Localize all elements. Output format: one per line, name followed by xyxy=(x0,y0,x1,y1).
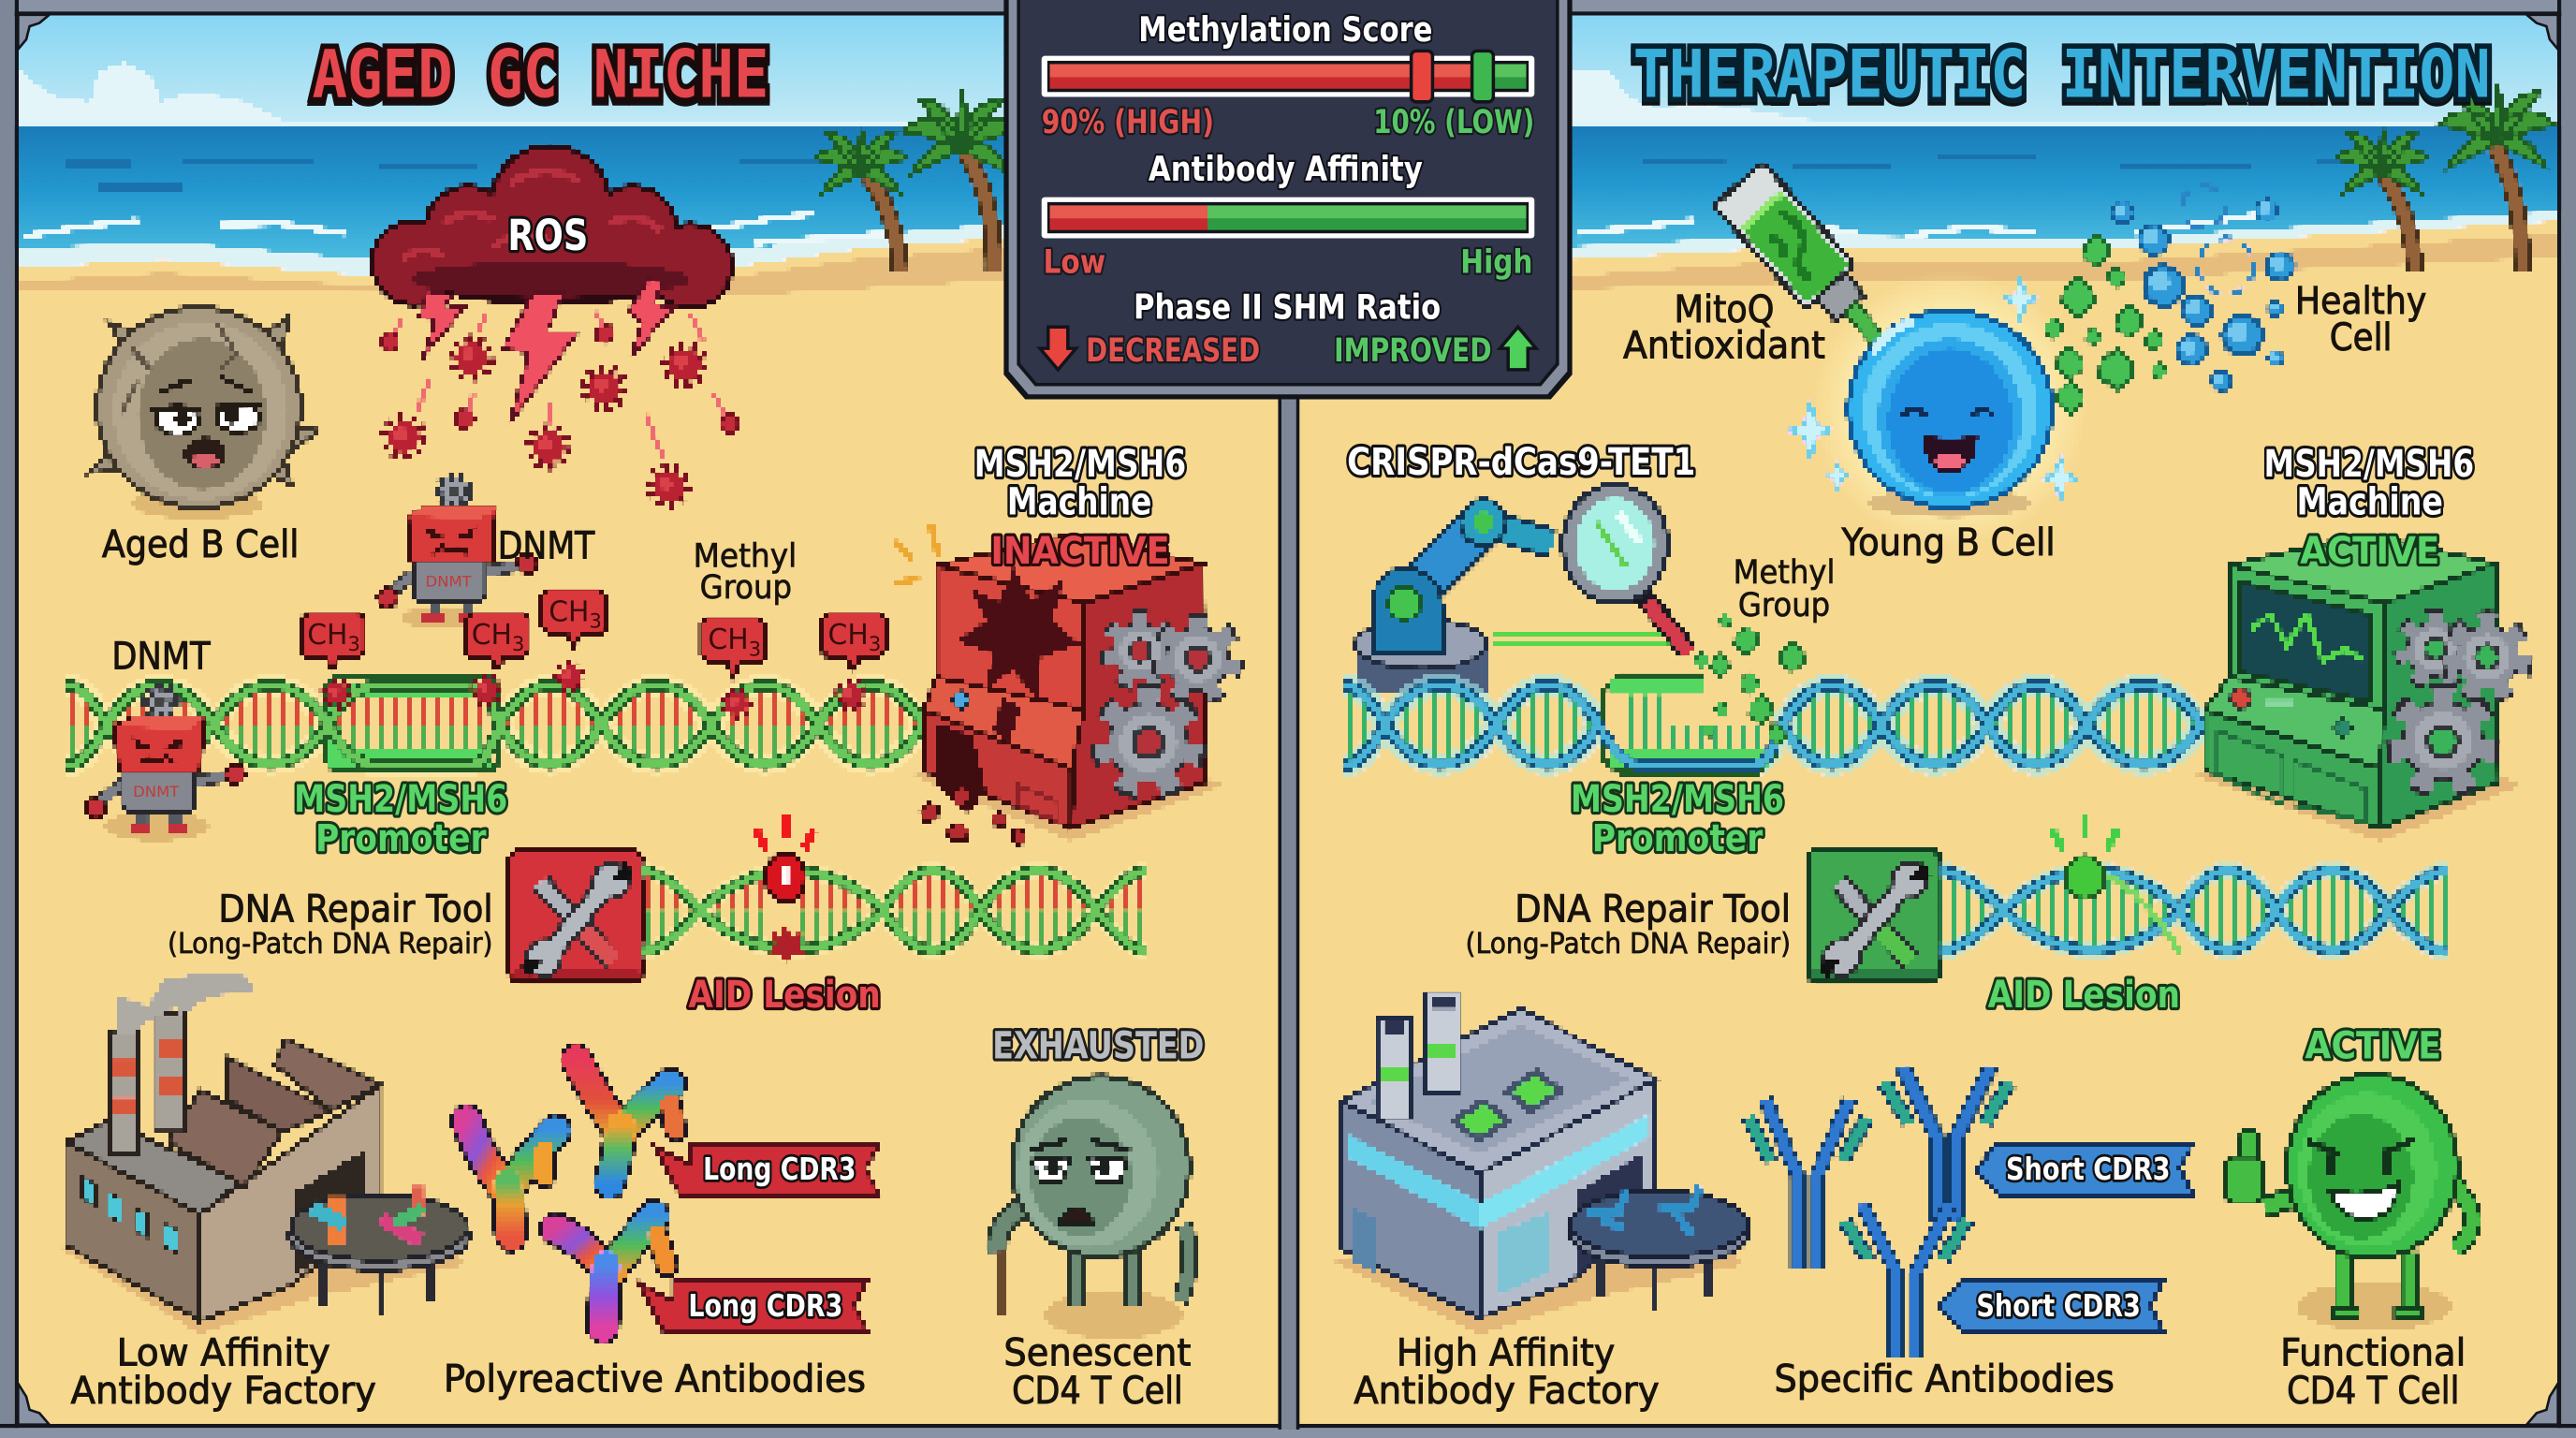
sea xyxy=(0,128,1292,259)
promoter box xyxy=(327,677,498,770)
ROS: ROS xyxy=(507,211,588,260)
promoter label: Promoter xyxy=(315,816,487,860)
specific label: Specific Antibodies xyxy=(1775,1357,2115,1401)
functional T cell xyxy=(2224,1075,2472,1331)
healthy cell label: Healthy xyxy=(2295,279,2426,323)
sparkles xyxy=(1788,276,2078,501)
promoter label right xyxy=(1571,777,1784,860)
methyl group right: Group xyxy=(1738,586,1830,624)
Young B Cell: Young B Cell xyxy=(1841,521,2056,565)
repaired pin xyxy=(2052,815,2117,899)
methyl group right xyxy=(1734,553,1835,624)
CH3 labels: 3 xyxy=(589,609,602,632)
polyreactive antibodies xyxy=(466,1060,675,1328)
Long CDR3 ribbons xyxy=(637,1144,879,1331)
repair tool icon xyxy=(509,849,642,983)
young B cell glow xyxy=(1812,271,2088,547)
lesion pin xyxy=(755,815,815,964)
decreased label: DECREASED xyxy=(1086,331,1260,370)
CH3 labels: CH xyxy=(307,619,347,652)
factory label right: Antibody Factory xyxy=(1354,1369,1660,1413)
CRISPR robot arm xyxy=(1355,485,1689,694)
long CDR3 xyxy=(688,1151,856,1324)
MitoQ label xyxy=(1623,287,1825,368)
affinity bar xyxy=(1042,198,1534,238)
10 percent label: 10% (LOW) xyxy=(1373,103,1534,141)
active T cell tag: ACTIVE xyxy=(2305,1023,2441,1067)
conveyor table xyxy=(289,1186,470,1314)
DNA strand right xyxy=(1344,614,2202,772)
machine label: Machine xyxy=(1007,479,1151,523)
machine label: MSH2/MSH6 xyxy=(974,442,1186,486)
DNA repair tool right xyxy=(1466,888,1791,961)
sky cloud xyxy=(20,63,292,125)
low affinity factory xyxy=(59,973,470,1334)
MitoQ bottle xyxy=(1714,162,1912,372)
inactive label: INACTIVE xyxy=(990,529,1170,573)
polyreactive label: Polyreactive Antibodies xyxy=(444,1357,866,1401)
functional label: Functional xyxy=(2280,1330,2466,1374)
labels: right panel xyxy=(1347,279,2474,1413)
machine inactive xyxy=(894,522,1236,846)
machine label right: MSH2/MSH6 xyxy=(2264,442,2474,486)
functional label xyxy=(2280,1330,2466,1413)
title: Therapeutic Intervention: THERAPEUTIC INTERVENTION xyxy=(1633,37,2491,113)
low label: Low xyxy=(1043,242,1105,281)
blue healthy particles xyxy=(2112,185,2294,391)
Methyl Group: Group xyxy=(700,568,792,607)
ROS particles xyxy=(379,312,740,506)
DNA strand main xyxy=(67,664,923,770)
healthy cell label xyxy=(2295,279,2426,360)
90 percent label: 90% (HIGH) xyxy=(1042,103,1214,141)
promoter label right: Promoter xyxy=(1592,816,1763,860)
promoter label: MSH2/MSH6 xyxy=(294,777,507,821)
specific antibodies xyxy=(1748,1066,2009,1356)
senescent T cell xyxy=(997,1077,1190,1339)
repair DNA right xyxy=(1940,815,2446,953)
foam band xyxy=(0,213,1018,276)
MitoQ label: Antioxidant xyxy=(1623,324,1825,368)
CRISPR label: CRISPR-dCas9-TET1 xyxy=(1347,440,1695,484)
palm trees right xyxy=(2334,82,2556,271)
active machine label: ACTIVE xyxy=(2300,529,2439,573)
icon: DNMT robot left xyxy=(85,687,245,835)
wet sand band xyxy=(0,246,1018,296)
methyl group right: Methyl xyxy=(1734,553,1835,592)
methylation bar xyxy=(1042,51,1534,102)
CH3 labels: CH xyxy=(472,619,512,652)
machine label right xyxy=(2264,442,2474,523)
titles xyxy=(312,37,2491,113)
promoter box right xyxy=(1603,675,1775,772)
released methyl particles xyxy=(1695,614,1804,744)
robot body text: DNMT xyxy=(426,573,472,591)
methylation heading: Methylation Score xyxy=(1138,9,1432,50)
healthy cell label: Cell xyxy=(2330,315,2392,360)
senescent label xyxy=(1003,1330,1191,1413)
CH3 tags xyxy=(300,590,886,677)
factory label xyxy=(70,1330,376,1413)
Methyl Group: Methyl xyxy=(694,537,797,576)
DNA repair tool label xyxy=(168,888,493,961)
promoter label right: MSH2/MSH6 xyxy=(1571,777,1784,821)
factory label right: High Affinity xyxy=(1397,1330,1615,1374)
sea right xyxy=(1292,128,2576,246)
improved label: IMPROVED xyxy=(1334,331,1492,370)
arrow down xyxy=(1040,327,1076,370)
machine label right: Machine xyxy=(2297,479,2443,523)
DNA repair tool label: DNA Repair Tool xyxy=(218,888,493,932)
green healing particles xyxy=(2045,235,2166,414)
foam right xyxy=(1292,198,2576,263)
arrow up xyxy=(1500,327,1536,370)
conveyor table right xyxy=(1569,1186,1749,1310)
factory label: Antibody Factory xyxy=(70,1369,376,1413)
factory label right xyxy=(1354,1330,1660,1413)
repair tool icon right xyxy=(1808,849,1940,983)
MitoQ label: MitoQ xyxy=(1674,287,1775,331)
long CDR3: Long CDR3 xyxy=(688,1287,842,1324)
exhausted label: EXHAUSTED xyxy=(992,1023,1204,1067)
dashboard panel xyxy=(1003,0,1573,399)
CH3 labels: 3 xyxy=(749,637,761,660)
palm trees xyxy=(813,89,1020,271)
CH3 labels: CH xyxy=(549,595,589,628)
panel art: therapeutic intervention xyxy=(1292,0,2576,1438)
factory label: Low Affinity xyxy=(117,1330,330,1374)
SHM heading: Phase II SHM Ratio xyxy=(1134,286,1441,327)
robot body text left: DNMT xyxy=(133,783,180,800)
long CDR3: Long CDR3 xyxy=(703,1151,856,1187)
icon: aged B cell xyxy=(89,307,318,520)
wet sand right xyxy=(1292,233,2576,292)
machine label xyxy=(974,442,1186,523)
CH3 labels: 3 xyxy=(347,632,360,655)
labels: left panel xyxy=(70,211,1204,1413)
senescent label: Senescent xyxy=(1003,1330,1191,1374)
high label: High xyxy=(1460,242,1533,281)
panel art: aged GC niche xyxy=(0,0,1292,1438)
high affinity factory xyxy=(1334,992,1749,1334)
young B cell xyxy=(1848,311,2052,518)
CH3 labels: CH xyxy=(828,619,869,652)
ROS storm cloud xyxy=(370,143,735,311)
DNA repair tool right: DNA Repair Tool xyxy=(1515,888,1791,932)
affinity heading: Antibody Affinity xyxy=(1149,149,1423,189)
Short CDR3 ribbons xyxy=(1939,1144,2193,1331)
title: Aged GC Niche: AGED GC NICHE xyxy=(312,37,768,113)
DNA repair tool right: (Long-Patch DNA Repair) xyxy=(1466,928,1791,961)
machine active xyxy=(2193,534,2525,842)
AID lesion right: AID Lesion xyxy=(1988,973,2180,1017)
Aged B Cell: Aged B Cell xyxy=(102,522,299,566)
promoter label xyxy=(294,777,507,860)
lightning bolts xyxy=(419,279,674,424)
sky cloud right xyxy=(1292,69,1840,125)
short CDR3: Short CDR3 xyxy=(1976,1287,2141,1324)
CH3 labels: CH xyxy=(708,624,749,656)
CH3 labels xyxy=(307,595,881,660)
CH3 labels: 3 xyxy=(869,632,881,655)
senescent label: CD4 T Cell xyxy=(1012,1369,1183,1413)
Methyl Group xyxy=(694,537,797,607)
repair DNA xyxy=(642,815,1147,964)
CH3 labels: 3 xyxy=(512,632,524,655)
DNA repair tool label: (Long-Patch DNA Repair) xyxy=(168,928,493,961)
short CDR3 xyxy=(1976,1151,2170,1324)
DNMT top: DNMT xyxy=(498,524,595,568)
AID lesion label: AID Lesion xyxy=(688,973,881,1017)
functional label: CD4 T Cell xyxy=(2287,1369,2459,1413)
DNMT left: DNMT xyxy=(111,634,211,678)
icon: DNMT robot top xyxy=(378,477,537,624)
short CDR3: Short CDR3 xyxy=(2006,1151,2170,1187)
